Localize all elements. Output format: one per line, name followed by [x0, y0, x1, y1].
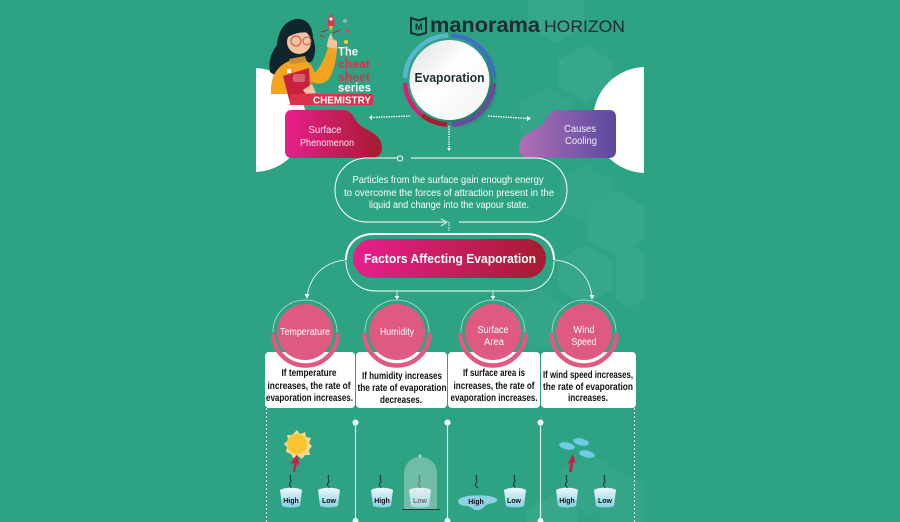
factor: temperature [266, 300, 353, 404]
panel: surface phenomenon: Surface [308, 125, 342, 136]
factor: temperature: evaporation increases. [266, 393, 353, 404]
beaker: humidity high [371, 475, 393, 508]
logo: manorama horizon [411, 14, 625, 37]
factor: humidity: decreases. [380, 395, 422, 406]
illustration: girl with book [269, 19, 337, 105]
panel: causes cooling: Cooling [565, 136, 597, 147]
factor: humidity: If humidity increases [362, 371, 442, 382]
evaporation circle [405, 36, 499, 129]
factors affecting evaporation heading: Factors Affecting Evaporation [364, 252, 536, 266]
icon: wind [558, 437, 596, 459]
logo: manorama horizon: manorama [430, 14, 540, 37]
factor: surface area: If surface area is [463, 368, 525, 379]
evaporation circle: Evaporation [414, 71, 484, 85]
beaker: surface area low: Low [507, 498, 522, 505]
panel: causes cooling [519, 110, 616, 158]
arrow: to definition [447, 126, 451, 151]
beaker: wind low [594, 475, 616, 508]
series title: the cheat sheet series: series [338, 82, 371, 94]
factor: humidity: the rate of evaporation [358, 383, 446, 394]
puddle: surface area high: High [468, 499, 484, 506]
arrow: to surface phenomenon [369, 115, 410, 120]
factor: temperature: If temperature [282, 368, 337, 379]
factor: wind speed: Wind [574, 325, 594, 336]
factor: surface area: evaporation increases. [450, 393, 538, 404]
arrow: to causes cooling [488, 116, 531, 121]
panel: causes cooling: Causes [564, 124, 596, 135]
chemistry ribbon [290, 94, 373, 106]
beaker: humidity high: High [374, 498, 390, 505]
puddle: surface area high [458, 475, 497, 510]
series title: the cheat sheet series: The [338, 46, 358, 58]
logo: manorama horizon: HORIZON [544, 17, 625, 36]
series title: the cheat sheet series: cheat [338, 59, 370, 71]
beaker: wind low: Low [598, 498, 613, 505]
arrow: to factors heading [448, 222, 450, 231]
factor: surface area: Surface [478, 325, 509, 336]
beaker under glass dome: humidity low: Low [413, 498, 428, 505]
series title: the cheat sheet series [338, 40, 371, 94]
beaker: wind high [556, 475, 578, 508]
factor: temperature: Temperature [280, 327, 330, 338]
panel: surface phenomenon: Phenomenon [300, 138, 354, 149]
definition panel: liquid and change into the vapour state. [369, 199, 529, 211]
factor: surface area [450, 300, 538, 404]
factor cards [265, 352, 636, 408]
definition panel [335, 156, 567, 226]
chemistry ribbon: CHEMISTRY [313, 96, 371, 106]
beaker: wind high: High [559, 498, 575, 505]
icon: sun [284, 430, 312, 459]
factor: surface area: increases, the rate of [454, 381, 535, 392]
factor: wind speed: the rate of evaporation [543, 382, 633, 393]
factors affecting evaporation heading [346, 234, 554, 291]
beaker under glass dome: humidity low [402, 454, 440, 510]
arrow: wind rise [568, 454, 576, 472]
factor: wind speed: increases. [568, 393, 608, 404]
series title: the cheat sheet series: sheet [338, 72, 370, 84]
definition panel: Particles from the surface gain enough energy [352, 174, 544, 186]
beaker: temperature low: Low [322, 498, 337, 505]
icon: rocket [320, 14, 349, 37]
panel: surface phenomenon [285, 110, 382, 158]
beaker: temperature high [280, 475, 302, 508]
arrow: temperature rise [290, 454, 300, 472]
beaker: temperature high: High [283, 498, 299, 505]
factor: humidity [358, 300, 446, 406]
factor: temperature: increases, the rate of [268, 381, 351, 392]
factor: wind speed: Speed [572, 337, 596, 348]
logo: manorama horizon: M [415, 22, 422, 32]
connectors to factors [305, 260, 594, 299]
factor: wind speed: If wind speed increases, [543, 370, 633, 381]
definition panel: to overcome the forces of attraction present in the [344, 187, 554, 199]
white corner circles [256, 67, 644, 173]
beaker: temperature low [318, 475, 340, 508]
column dividers [266, 408, 634, 522]
factor: wind speed [543, 300, 633, 404]
factor: humidity: Humidity [380, 327, 414, 338]
factor: surface area: Area [484, 337, 504, 348]
beaker: surface area low [504, 475, 526, 508]
